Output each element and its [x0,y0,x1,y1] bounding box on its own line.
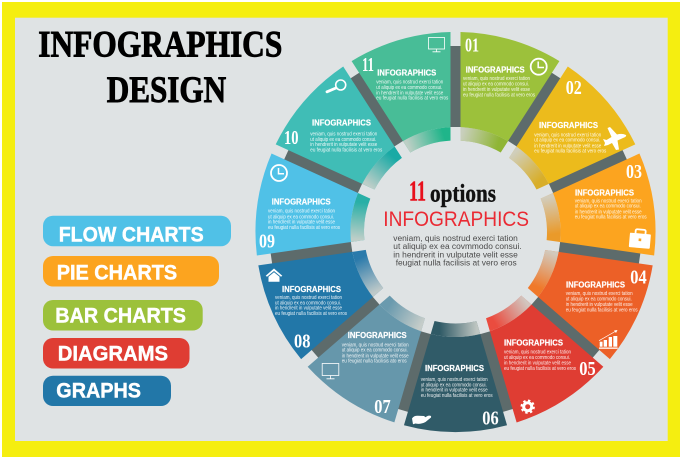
segment 07 [299,279,428,422]
centre text block: feugiat nulla facilisis at vero eros [396,258,517,268]
connector bars between segments [271,46,640,412]
segment 08 [236,206,392,359]
segment 10 [276,54,426,194]
segment 03: eu feugiat nulla facilisis at vero eros [575,215,647,221]
segment 11: ut aliquip ex ea commodo consui. [376,85,442,91]
segment 10: ut aliquip ex ea commodo consui. [310,137,376,143]
segment 08: ut aliquip ex ea commodo consui. [275,300,341,306]
segment 05: veniam, quis nostrud exerci tation [504,350,571,356]
segment 03: in hendrerit in vulputate velit esse [575,209,642,215]
segment 04: veniam, quis nostrud exerci tation [566,291,633,297]
segment 03: INFOGRAPHICS [575,188,635,197]
segment 11: veniam, quis nostrud exerci tation [376,80,443,86]
segment 01: eu feugiat nulla facilisis at vero eros [463,93,535,99]
segment 01: veniam, quis nostrud exerci tation [463,76,530,82]
segment 04: eu feugiat nulla facilisis at vero eros [566,307,638,313]
segment 10: 10 [284,127,298,149]
centre heading: infographics: INFOGRAPHICS [383,208,529,231]
segment 04: 04 [630,266,647,288]
segment 01 [460,32,559,152]
segment 10: eu feugiat nulla facilisis at vero eros [310,148,383,154]
icon: hand [412,416,431,424]
segment 05: eu feugiat nulla facilisis at vero eros [504,366,576,372]
pill: graphs [43,376,171,406]
centre heading: 11 options: 11 [409,176,426,208]
segment 06: 06 [482,407,499,429]
title: DESIGN [107,70,226,111]
segment 02: INFOGRAPHICS [539,121,599,130]
segment 11: in hendrerit in vulputate velit esse [376,90,443,96]
centre heading: 11 options: options [430,181,496,208]
segment 07: in hendrerit in vulputate velit esse [342,353,409,359]
segment 09: ut aliquip ex ea commodo consui. [268,214,334,220]
segment 08: eu feugiat nulla facilisis at vero eros [275,311,347,317]
pill: bar charts [43,300,203,330]
segment 04: ut aliquip ex ea commodo consui. [566,296,632,302]
segment 01: in hendrerit in vulputate velit esse [463,87,530,93]
segment 10: INFOGRAPHICS [312,119,372,128]
segment 11: eu feugiat nulla facilisis at vero eros [376,96,449,102]
segment 03: veniam, quis nostrud exerci tation [575,198,642,204]
segment 06: ut aliquip ex ea commodo consui. [421,382,487,388]
pill: graphs: GRAPHS [56,379,141,402]
icon: briefcase [629,229,651,249]
segment 10: in hendrerit in vulputate velit esse [310,142,377,148]
pill: diagrams: DIAGRAMS [58,342,168,365]
segment 11: 11 [362,54,374,76]
segment 08: in hendrerit in vulputate velit esse [275,306,342,312]
segment 09: eu feugiat nulla facilisis at vero eros [268,225,340,231]
icon: monitor [322,364,339,379]
pill: bar charts: BAR CHARTS [55,304,186,327]
pill: pie charts [43,256,219,286]
segment 07: eu feugiat nulla facilisis ato eros [342,359,407,365]
centre text block [393,233,522,268]
segment 05: 05 [579,358,596,380]
segment 01: INFOGRAPHICS [466,66,525,75]
icon: clock [271,165,287,181]
icon: plane [603,127,626,150]
segment 09 [243,140,376,256]
segment 05: INFOGRAPHICS [504,339,564,348]
pill: flow charts: FLOW CHARTS [59,223,204,246]
centre text block: veniam, quis nostrud exerci tation [393,233,518,243]
segment 11 [352,8,500,162]
segment 08: 08 [294,331,310,353]
segment 07: veniam, quis nostrud exerci tation [342,342,409,348]
icon: magnifier [327,80,346,92]
pill: pie charts: PIE CHARTS [57,261,177,284]
segment 04: INFOGRAPHICS [566,280,626,289]
icon: house [266,268,282,282]
segment 04 [519,248,653,363]
segment 07: INFOGRAPHICS [348,331,407,340]
segment 03: ut aliquip ex ea commodo consui. [575,204,641,210]
segment 03: 03 [626,161,642,183]
pill: diagrams [43,338,190,368]
segment 02: veniam, quis nostrud exerci tation [534,132,601,138]
segment 01: 01 [465,35,479,57]
segment 10: veniam, quis nostrud exerci tation [310,132,377,138]
segment 04: in hendrerit in vulputate velit esse [566,302,633,308]
segment 05: ut aliquip ex ea commodo consui. [504,355,570,361]
pill: flow charts [43,216,231,246]
segment 06: in hendrerit in vulputate velit esse [421,388,488,394]
centre text block: in hendrerit in vulputate velit esse [393,249,518,259]
segment 09: INFOGRAPHICS [272,198,331,207]
segment 06: eu feugiat nulla facilisis at vero eros [421,393,493,399]
segment 07: ut aliquip ex ea commodo consui. [342,348,408,354]
segment 07: 07 [374,396,391,418]
segment 05 [448,288,603,441]
icon: monitor [428,38,444,52]
icon: clock [531,59,547,75]
title: INFOGRAPHICS [38,25,282,66]
segment 02: in hendrerit in vulputate velit esse [534,143,601,149]
segment 06 [378,310,507,453]
centre heading: 11 options [409,176,496,208]
segment 08: INFOGRAPHICS [282,285,342,294]
segment 02: 02 [566,77,582,99]
segment 09: veniam, quis nostrud exerci tation [268,209,335,215]
segment 02: ut aliquip ex ea commodo consui. [534,138,600,144]
title [38,25,282,111]
segment 02 [503,67,651,221]
segment 06: INFOGRAPHICS [425,364,485,373]
segment 02: eu feugiat nulla facilisis at vero eros [534,149,607,155]
segment 05: in hendrerit in vulputate velit esse [504,361,571,367]
segment 11: INFOGRAPHICS [377,69,437,78]
segment 03 [530,153,680,293]
segment 01: ut aliquip ex ea commodo consui. [463,81,529,87]
icon: gear [522,401,534,413]
segment 09: 09 [259,230,275,252]
segment 06: veniam, quis nostrud exerci tation [421,377,488,383]
segment 09: in hendrerit in vulputate velit esse [268,220,335,226]
icon: bar chart [599,330,618,349]
centre text block: ut aliquip ex ea covmmodo consui. [393,241,522,251]
segment 08: veniam, quis nostrud exerci tation [275,295,342,301]
